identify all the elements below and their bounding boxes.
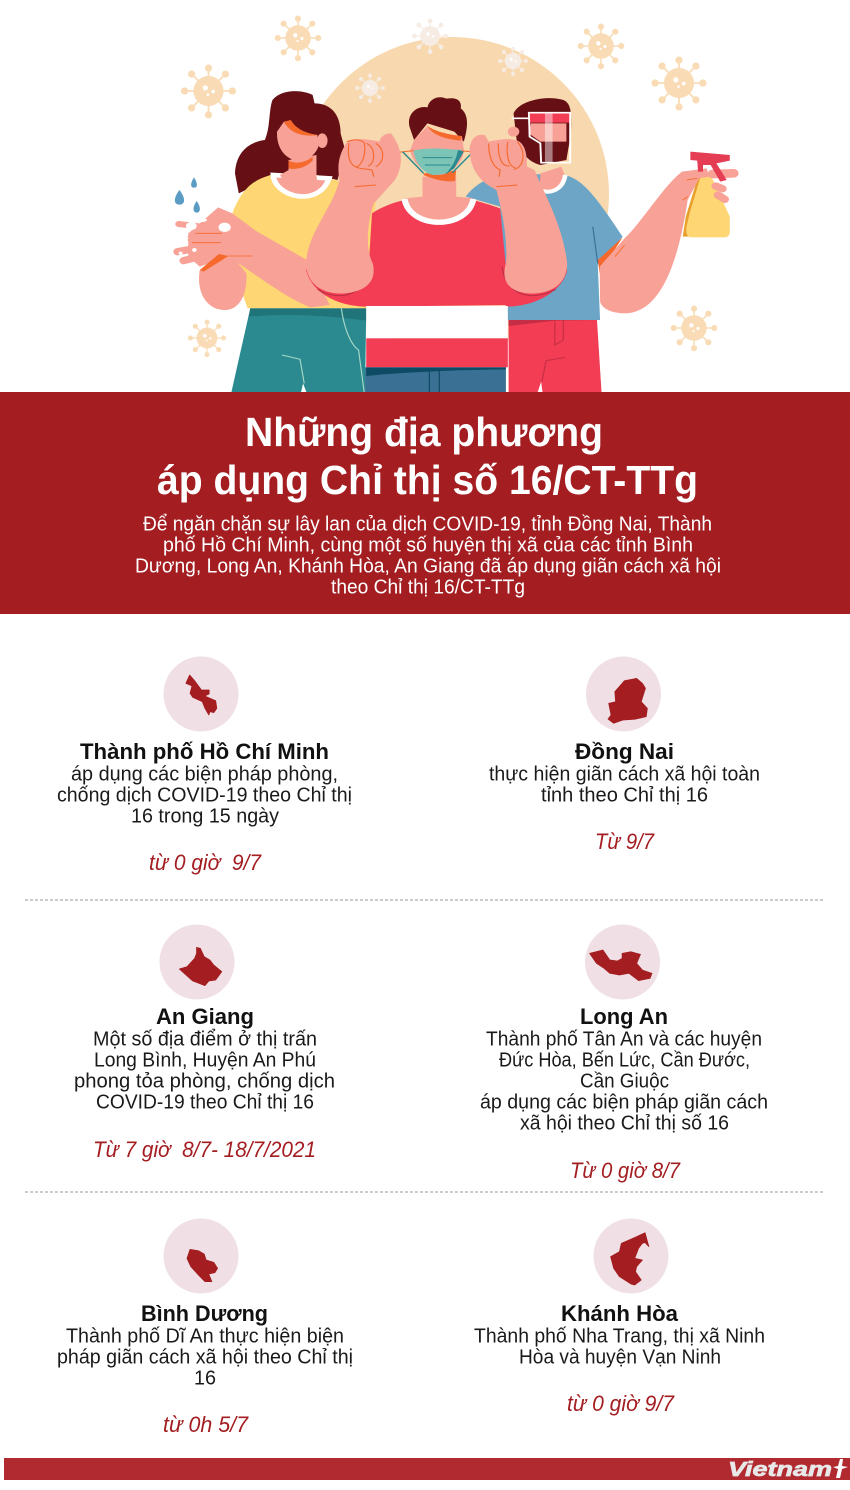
panel: Long An: áp dụng các biện pháp giãn cách bbox=[480, 1092, 768, 1114]
woman with yellow shirt bbox=[178, 91, 376, 310]
panel: An Giang: Một số địa điểm ở thị trấn bbox=[93, 1029, 317, 1051]
panel: An Giang bbox=[74, 924, 335, 1162]
panel: An Giang: phong tỏa phòng, chống dịch bbox=[74, 1071, 335, 1093]
panel: Bình Dương: pháp giãn cách xã hội theo Chỉ thị bbox=[57, 1347, 353, 1369]
panel: Khánh Hòa bbox=[474, 1218, 765, 1416]
panel: Thành phố Hồ Chí Minh: Thành phố Hồ Chí Minh bbox=[80, 739, 329, 764]
man with blue shirt bbox=[466, 98, 623, 320]
heading: Những địa phương bbox=[245, 409, 603, 455]
virus particles bbox=[181, 16, 717, 357]
icon: Dong Nai map bbox=[586, 656, 661, 732]
panel: An Giang: COVID-19 theo Chỉ thị 16 bbox=[96, 1092, 314, 1114]
icon: An Giang map bbox=[160, 924, 234, 1000]
icon: Binh Duong map bbox=[164, 1218, 238, 1294]
panel: Long An: Đức Hòa, Bến Lức, Cần Đước, bbox=[499, 1050, 750, 1072]
panel: Long An: Cần Giuộc bbox=[580, 1071, 669, 1093]
water drops bbox=[175, 177, 200, 213]
panel: Bình Dương: Bình Dương bbox=[141, 1301, 268, 1326]
spray bottle held in raised arm bbox=[600, 152, 734, 313]
panel: Khánh Hòa: từ 0 giờ 9/7 bbox=[567, 1391, 675, 1416]
panel: Long An: Long An bbox=[580, 1004, 668, 1029]
arms and fists bbox=[306, 133, 401, 293]
panel: Thành phố Hồ Chí Minh: áp dụng các biện pháp phòng, bbox=[71, 764, 338, 786]
intro text bbox=[135, 514, 721, 599]
panel: Thành phố Hồ Chí Minh: 16 trong 15 ngày bbox=[131, 806, 279, 828]
heading: áp dụng Chỉ thị số 16/CT-TTg bbox=[157, 457, 698, 503]
icon: Ho Chi Minh map bbox=[164, 656, 238, 732]
panel: Bình Dương bbox=[57, 1218, 353, 1437]
panel: Long An: Thành phố Tân An và các huyện bbox=[486, 1029, 762, 1051]
panel: Long An bbox=[480, 924, 768, 1183]
panel: Bình Dương: Thành phố Dĩ An thực hiện biện bbox=[66, 1326, 344, 1348]
panel: Khánh Hòa: Hòa và huyện Vạn Ninh bbox=[519, 1347, 721, 1369]
central man with red shirt bbox=[306, 97, 567, 307]
panel: Khánh Hòa: Thành phố Nha Trang, thị xã Ninh bbox=[474, 1326, 765, 1348]
panel: Long An: xã hội theo Chỉ thị số 16 bbox=[520, 1113, 729, 1135]
washing hands bbox=[178, 207, 330, 307]
title band bbox=[0, 392, 850, 614]
intro text: Dương, Long An, Khánh Hòa, An Giang đã áp dụng giãn cách xã hội bbox=[135, 556, 721, 578]
intro text: phố Hồ Chí Minh, cùng một số huyện thị xã của các tỉnh Bình bbox=[163, 535, 693, 557]
panel: Đồng Nai: Đồng Nai bbox=[575, 739, 674, 764]
white and red covering blocks bbox=[365, 306, 508, 393]
panel: Đồng Nai: tỉnh theo Chỉ thị 16 bbox=[541, 785, 708, 807]
panel: Bình Dương: 16 bbox=[194, 1368, 216, 1390]
footer bar with Vietnam+ logo bbox=[4, 1458, 850, 1481]
panel: An Giang: An Giang bbox=[156, 1004, 254, 1029]
heading bbox=[157, 409, 698, 503]
woman's teal trousers bbox=[231, 308, 366, 393]
panel: Khánh Hòa: Khánh Hòa bbox=[561, 1301, 679, 1326]
panel: Thành phố Hồ Chí Minh: chống dịch COVID-19 theo Chỉ thị bbox=[57, 785, 352, 807]
intro text: Để ngăn chặn sự lây lan của dịch COVID-19, tỉnh Đồng Nai, Thành bbox=[143, 514, 712, 536]
footer bar with Vietnam+ logo: Vietnam bbox=[728, 1459, 832, 1481]
panel: An Giang: Từ 7 giờ 8/7- 18/7/2021 bbox=[93, 1137, 316, 1162]
icon: Long An map bbox=[585, 924, 660, 1000]
panel: Long An: Từ 0 giờ 8/7 bbox=[570, 1158, 681, 1183]
panel: An Giang: Long Bình, Huyện An Phú bbox=[94, 1050, 316, 1072]
icon: Khanh Hoa map bbox=[594, 1218, 668, 1294]
panel: Thành phố Hồ Chí Minh bbox=[57, 656, 352, 875]
panel: Đồng Nai bbox=[489, 656, 760, 854]
surgical mask bbox=[395, 149, 479, 175]
panel: Đồng Nai: thực hiện giãn cách xã hội toàn bbox=[489, 764, 760, 786]
hero illustration: people wearing masks bbox=[175, 16, 734, 393]
intro text: theo Chỉ thị 16/CT-TTg bbox=[331, 577, 525, 599]
panel: Thành phố Hồ Chí Minh: từ 0 giờ 9/7 bbox=[149, 850, 262, 875]
man's red trousers bbox=[509, 320, 602, 393]
panel: Đồng Nai: Từ 9/7 bbox=[595, 829, 655, 854]
panel: Bình Dương: từ 0h 5/7 bbox=[163, 1412, 249, 1437]
background sun circle bbox=[295, 37, 609, 351]
